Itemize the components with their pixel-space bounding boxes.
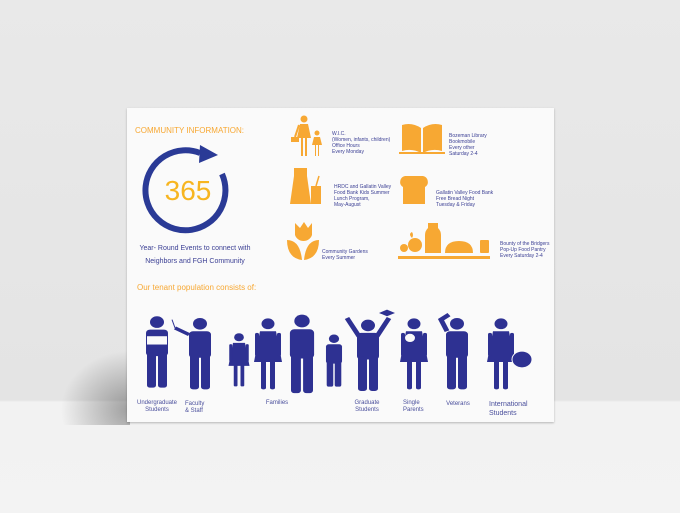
- text: HRDC: Food Bank Kids Summer: [334, 190, 390, 196]
- paper: [127, 108, 554, 422]
- figure: veteran: [441, 315, 468, 389]
- text: bread night: [436, 190, 494, 208]
- text: bounty: Pop-Up Food Pantry: [500, 247, 546, 253]
- icon: pantry food: [398, 223, 490, 259]
- paper: Students: [355, 407, 379, 413]
- text: WIC: Office Hours: [332, 143, 360, 149]
- paper: International: [489, 401, 528, 408]
- paper: Graduate: [354, 400, 380, 406]
- text: bread night: Free Bread Night: [436, 196, 474, 202]
- paper: Faculty: [185, 401, 204, 407]
- text: library: Every other: [449, 145, 475, 151]
- paper: Parents: [403, 407, 424, 413]
- icon: tulip: [287, 222, 319, 260]
- text: WIC: (Women, infants, children): [332, 137, 390, 143]
- figure: boy: [326, 335, 342, 387]
- figure: man: [290, 315, 314, 393]
- figure: graduate: [347, 310, 395, 391]
- text: library: Bookmobile: [449, 139, 475, 145]
- labels: Undergraduate: [137, 400, 177, 406]
- text: WIC: [332, 131, 390, 155]
- icon: 365 circular arrow: 365: [165, 175, 211, 206]
- labels: [137, 400, 177, 413]
- icon: book: [399, 124, 445, 154]
- paper: & Staff: [185, 408, 203, 414]
- paper: Students: [489, 410, 517, 417]
- text: library: [449, 133, 487, 157]
- text: WIC: W.I.C.: [332, 131, 346, 137]
- figure: girl: [228, 333, 250, 386]
- text: bounty: [500, 241, 550, 259]
- text: WIC: Every Monday: [332, 149, 364, 155]
- icon: bread: [400, 176, 428, 204]
- text: HRDC: [334, 184, 392, 208]
- text block: events: Neighbors and FGH Community: [145, 258, 245, 265]
- figure: faculty: [172, 318, 211, 389]
- heading: tenant population: Our tenant population consists of:: [137, 283, 256, 292]
- icon: mother child: [291, 116, 322, 156]
- title: COMMUNITY INFORMATION:: [135, 126, 244, 135]
- paper: Single: [403, 400, 420, 406]
- paper: Families: [266, 400, 288, 406]
- people row: [146, 310, 532, 394]
- text: bread night: Tuesday & Friday: [436, 202, 475, 208]
- text: HRDC: May-August: [334, 202, 361, 208]
- figure: international: [487, 318, 532, 389]
- text: library: Bozeman Library: [449, 133, 487, 139]
- figure: woman: [254, 318, 282, 389]
- paper: Veterans: [446, 401, 470, 407]
- text: gardens: Community Gardens: [322, 249, 368, 255]
- text block: events: [139, 244, 251, 265]
- text: gardens: Every Summer: [322, 255, 355, 261]
- text: library: Saturday 2-4: [449, 151, 478, 157]
- text: bread night: Gallatin Valley Food Bank: [436, 190, 493, 196]
- labels: Students: [145, 407, 169, 413]
- figure: single parent: [400, 318, 428, 389]
- icon: 365 circular arrow: [142, 145, 228, 234]
- text: gardens: [322, 249, 368, 261]
- text block: events: Year- Round Events to connect with: [139, 245, 251, 252]
- figure: undergraduate: [146, 316, 168, 388]
- text: HRDC: HRDC and Gallatin Valley: [334, 184, 391, 190]
- icon: lunch bag: [290, 168, 321, 204]
- text: bounty: Bounty of the Bridgers: [500, 241, 549, 247]
- text: bounty: Every Saturday 2-4: [500, 253, 543, 259]
- text: HRDC: Lunch Program,: [334, 196, 370, 202]
